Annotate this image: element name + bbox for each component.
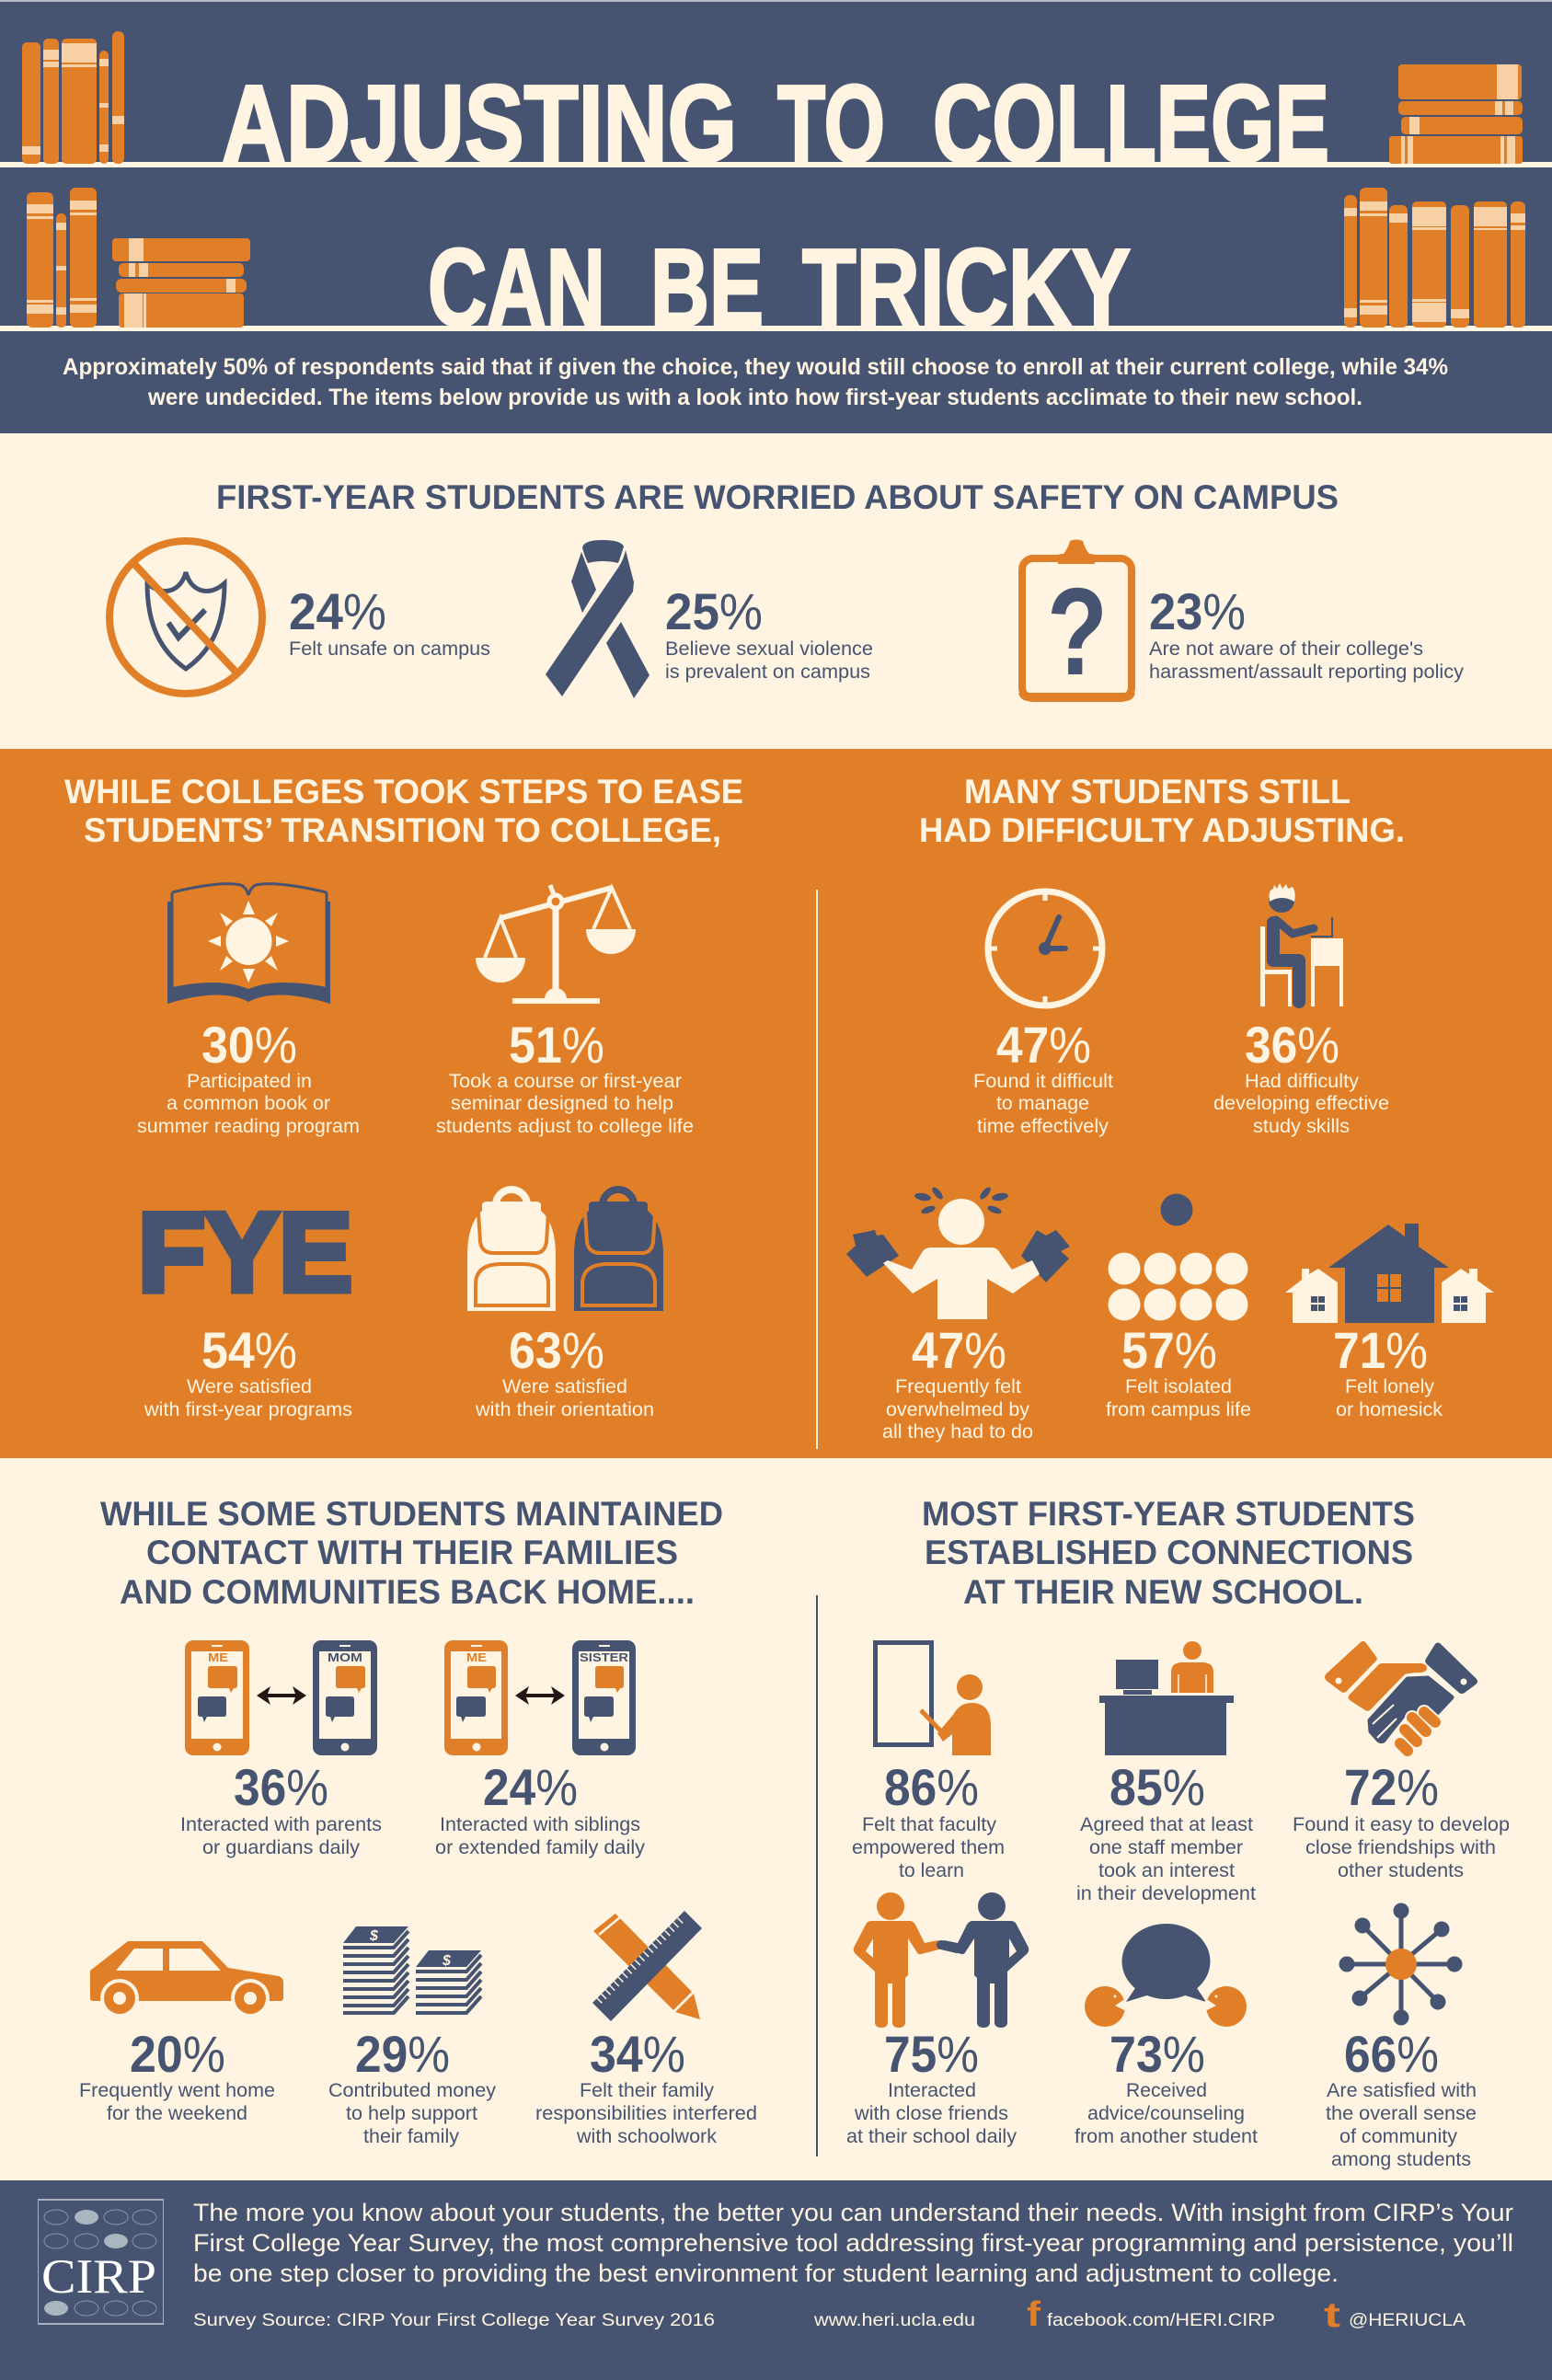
stat: 47% overwhelmed: Frequently felt: [895, 1376, 1021, 1397]
stat: 75%: with close friends: [854, 2103, 1008, 2124]
books: top left: [22, 31, 124, 164]
twitter link: [1324, 2296, 1466, 2335]
stat: 23%: harassment/assault reporting policy: [1149, 661, 1465, 683]
stat: 47% time: Found it difficult: [973, 1071, 1113, 1092]
stat: 29%: to help support: [346, 2103, 477, 2124]
stat: 47% time: 47%: [996, 1016, 1091, 1074]
stat: 73%: from another student: [1075, 2126, 1258, 2147]
stat: 66%: of community: [1339, 2126, 1458, 2147]
stat: 30%: [137, 1016, 360, 1137]
stat: 66%: [1326, 2025, 1477, 2170]
heading: new school: [922, 1495, 1415, 1611]
title line 1: [222, 63, 1329, 186]
icon: money stacks: $: [369, 1928, 379, 1944]
icon: clock: [988, 891, 1102, 1006]
heading: difficulty adjusting: [919, 773, 1405, 849]
stat: 30%: 30%: [201, 1016, 297, 1074]
icon: phone me 2: [444, 1640, 508, 1755]
stat: 54%: Were satisfied: [187, 1376, 312, 1397]
stat: 85%: in their development: [1076, 1883, 1256, 1904]
stat: 72%: Found it easy to develop: [1293, 1814, 1510, 1835]
heading: families: CONTACT WITH THEIR FAMILIES: [146, 1534, 678, 1571]
stat: 36% parents: or guardians daily: [202, 1837, 361, 1858]
icon: two people: [854, 1892, 1029, 2028]
stat: 47% overwhelmed: 47%: [912, 1321, 1006, 1379]
footer text: The more you know about your students, the better you can understand their needs. With insight from CIRP’s Your: [193, 2199, 1513, 2226]
icon: money stacks: [343, 1926, 481, 2013]
icon: phone me 1: ME: [208, 1650, 228, 1664]
heading: steps to ease: WHILE COLLEGES TOOK STEPS TO EASE: [64, 773, 743, 811]
stat: 30%: a common book or: [167, 1093, 330, 1114]
stat: 34%: Felt their family: [580, 2080, 715, 2101]
stat: 72%: other students: [1338, 1860, 1464, 1881]
stat: 86%: [852, 1758, 1005, 1881]
icon: ribbon: [546, 540, 650, 698]
icon: phone sister: SISTER: [580, 1650, 629, 1664]
stat: 34%: [535, 2025, 757, 2147]
stat: 34%: responsibilities interfered: [535, 2103, 757, 2124]
books: bottom right: [1344, 188, 1525, 328]
stat: 36% study: study skills: [1253, 1116, 1350, 1137]
stat: 73%: advice/counseling: [1087, 2103, 1245, 2124]
stat: 66%: the overall sense: [1326, 2103, 1477, 2124]
stat: 72%: 72%: [1344, 1758, 1439, 1816]
stat: 51%: students adjust to college life: [436, 1116, 694, 1137]
stat: 75%: [846, 2025, 1017, 2147]
stat: 25%: Believe sexual violence: [665, 638, 873, 660]
logo: CIRP: [38, 2199, 164, 2325]
intro text: [63, 354, 1448, 410]
survey source: Survey Source: CIRP Your First College Year Survey 2016: [193, 2311, 715, 2330]
stat: 36% parents: Interacted with parents: [180, 1814, 382, 1835]
stat: 36% parents: [180, 1758, 382, 1858]
logo: CIRP: CIRP: [41, 2250, 156, 2304]
stat: 86%: to learn: [899, 1860, 964, 1881]
panel: footer: [0, 2180, 1552, 2380]
stat: 72%: [1293, 1758, 1510, 1881]
footer text: [193, 2199, 1513, 2287]
stat: 20%: for the weekend: [107, 2103, 247, 2124]
intro text: were undecided. The items below provide us with a look into how first-year students acclimate to their new school.: [147, 385, 1362, 410]
heading: families: AND COMMUNITIES BACK HOME....: [120, 1573, 695, 1611]
stat: 66%: Are satisfied with: [1327, 2080, 1477, 2101]
stat: 57%: from campus life: [1106, 1399, 1251, 1420]
icon: car: [90, 1941, 283, 2018]
stat: 20%: Frequently went home: [79, 2080, 275, 2101]
icon: phone sister: [572, 1640, 636, 1755]
icon: overwhelmed person: [846, 1186, 1070, 1319]
panel: safety: [109, 478, 1465, 701]
footer text: be one step closer to providing the best environment for student learning and adjustment to college.: [193, 2259, 1339, 2287]
stat: 47% overwhelmed: [882, 1321, 1033, 1443]
title line 1: ADJUSTING: [222, 63, 737, 186]
panel: transition: [0, 749, 1552, 1458]
stat: 75%: Interacted: [888, 2080, 976, 2101]
stat: 57%: [1106, 1321, 1251, 1420]
stat: 47% time: to manage: [996, 1093, 1089, 1114]
stat: 73%: Received: [1126, 2080, 1207, 2101]
stat: 85%: took an interest: [1098, 1860, 1235, 1881]
heading: difficulty adjusting: HAD DIFFICULTY ADJUSTING.: [919, 811, 1405, 849]
icon: pencil and ruler: [592, 1911, 702, 2021]
icon: teacher at board: [876, 1643, 991, 1755]
stat: 86%: empowered them: [852, 1837, 1005, 1858]
stat: 85%: 85%: [1109, 1758, 1205, 1816]
intro text: Approximately 50% of respondents said that if given the choice, they would still choose to enroll at their current college, while 34%: [63, 354, 1448, 380]
icon: isolated dot: [1108, 1194, 1247, 1321]
stat: 23%: [1149, 582, 1465, 683]
stat: 36% parents: 36%: [234, 1758, 328, 1816]
title line 2: TRICKY: [802, 226, 1131, 350]
shelf 2: [0, 326, 1552, 331]
arrow: two-way 2: [515, 1686, 565, 1705]
heading: steps to ease: STUDENTS’ TRANSITION TO COLLEGE,: [84, 811, 721, 849]
icon: scales: [476, 885, 636, 1004]
icon: money stacks: $: [442, 1953, 452, 1969]
stat: 63%: 63%: [509, 1321, 604, 1379]
panel: connections: [79, 1495, 1510, 2170]
facebook link: facebook.com/HERI.CIRP: [1047, 2311, 1275, 2330]
stat: 47% overwhelmed: all they had to do: [882, 1421, 1033, 1443]
icon: open book with sun: [167, 884, 330, 1004]
stat: 63%: [475, 1321, 654, 1420]
stat: 25%: [665, 582, 873, 683]
heading: families: WHILE SOME STUDENTS MAINTAINED: [100, 1495, 723, 1533]
stat: 75%: at their school daily: [846, 2126, 1017, 2147]
title line 1: COLLEGE: [933, 63, 1329, 186]
stat: 57%: 57%: [1121, 1321, 1217, 1379]
stat: 29%: Contributed money: [328, 2080, 497, 2101]
stat: 54%: [144, 1321, 352, 1420]
icon: phone mom: [313, 1640, 377, 1755]
icon: phone me 1: [185, 1640, 249, 1755]
stat: 24%: [289, 582, 490, 660]
heading: steps to ease: [64, 773, 743, 849]
stat: 51%: 51%: [509, 1016, 604, 1074]
icon: community network: [1339, 1903, 1463, 2026]
heading: new school: AT THEIR NEW SCHOOL.: [963, 1573, 1363, 1611]
stat: 47% time: time effectively: [977, 1116, 1109, 1137]
website: www.heri.ucla.edu: [813, 2311, 975, 2330]
stat: 71%: 71%: [1333, 1321, 1428, 1379]
stat: 24%: Felt unsafe on campus: [289, 638, 490, 660]
stat: 29%: their family: [363, 2126, 460, 2147]
stat: 54%: 54%: [201, 1321, 297, 1379]
stat: 23%: Are not aware of their college's: [1149, 638, 1423, 660]
icon: clipboard question: ?: [1047, 562, 1108, 701]
stat: 30%: summer reading program: [137, 1116, 360, 1137]
icon: crossed-out shield: [109, 541, 262, 694]
stat: 75%: 75%: [884, 2025, 979, 2083]
stat: 36% study: developing effective: [1213, 1093, 1389, 1114]
heading: safety: FIRST-YEAR STUDENTS ARE WORRIED ABOUT SAFETY ON CAMPUS: [216, 478, 1339, 516]
icon: backpack navy: [574, 1190, 663, 1311]
stat: 72%: close friendships with: [1305, 1837, 1496, 1858]
heading: new school: MOST FIRST-YEAR STUDENTS: [922, 1495, 1415, 1533]
stat: 20%: 20%: [130, 2025, 225, 2083]
stat: 71%: or homesick: [1336, 1399, 1443, 1420]
title line 2: CAN: [428, 226, 605, 350]
icon: phone me 2: ME: [466, 1650, 487, 1664]
stat: 25%: 25%: [665, 582, 763, 640]
shelf 1: [0, 162, 1552, 167]
stat: 51%: [436, 1016, 694, 1137]
heading: families: [100, 1495, 723, 1611]
footer text: First College Year Survey, the most comprehensive tool addressing first-year programming and persistence, you’ll: [193, 2229, 1513, 2257]
stat: 36% study: [1213, 1016, 1389, 1137]
icon: clipboard question: [1018, 539, 1135, 701]
stat: 47% overwhelmed: overwhelmed by: [886, 1399, 1030, 1420]
stat: 86%: 86%: [884, 1758, 979, 1816]
icon: staff at desk: [1099, 1641, 1234, 1755]
stat: 23%: 23%: [1149, 582, 1246, 640]
heading: difficulty adjusting: MANY STUDENTS STILL: [964, 773, 1351, 811]
stat: 57%: Felt isolated: [1125, 1376, 1232, 1397]
stat: 66%: 66%: [1344, 2025, 1439, 2083]
books: bottom left: [27, 188, 250, 328]
stat: 36% study: Had difficulty: [1245, 1071, 1360, 1092]
title line 2: BE: [650, 226, 764, 350]
books: top right stack: [1389, 64, 1523, 164]
stat: 51%: Took a course or first-year: [449, 1071, 682, 1092]
twitter link: t: [1324, 2296, 1340, 2335]
panel: header: [0, 0, 1552, 433]
stat: 24% siblings: or extended family daily: [435, 1837, 646, 1858]
stat: 24% siblings: [435, 1758, 646, 1858]
stat: 73%: 73%: [1109, 2025, 1205, 2083]
stat: 29%: [328, 2025, 497, 2147]
stat: 34%: 34%: [590, 2025, 685, 2083]
stat: 24% siblings: Interacted with siblings: [440, 1814, 640, 1835]
stat: 86%: Felt that faculty: [862, 1814, 997, 1835]
title line 1: TO: [777, 63, 885, 186]
icon: houses: [1285, 1224, 1494, 1323]
facebook link: [1027, 2295, 1275, 2334]
stat: 24% siblings: 24%: [483, 1758, 578, 1816]
stat: 34%: with schoolwork: [576, 2126, 717, 2147]
stat: 51%: seminar designed to help: [451, 1093, 673, 1114]
stat: 29%: 29%: [355, 2025, 450, 2083]
stat: 25%: is prevalent on campus: [665, 661, 870, 683]
stat: 85%: Agreed that at least: [1080, 1814, 1253, 1835]
stat: 54%: with first-year programs: [144, 1399, 352, 1420]
heading: new school: ESTABLISHED CONNECTIONS: [925, 1534, 1413, 1571]
title line 2: [428, 226, 1131, 350]
icon: student at desk: [1260, 883, 1343, 1006]
stat: 36% study: 36%: [1245, 1016, 1339, 1074]
stat: 71%: [1333, 1321, 1443, 1420]
stat: 20%: [79, 2025, 275, 2124]
stat: 73%: [1075, 2025, 1258, 2147]
stat: 66%: among students: [1331, 2149, 1471, 2170]
stat: 63%: Were satisfied: [502, 1376, 627, 1397]
icon: backpack cream: [467, 1190, 556, 1311]
twitter link: @HERIUCLA: [1349, 2311, 1466, 2330]
icon: advice speech bubble: [1085, 1924, 1247, 2027]
stat: 24%: 24%: [289, 582, 386, 640]
stat: 47% time: [973, 1016, 1113, 1137]
arrow: two-way 1: [257, 1686, 306, 1705]
stat: 30%: Participated in: [187, 1071, 312, 1092]
facebook link: f: [1027, 2295, 1040, 2334]
icon: FYE: FYE: [138, 1190, 352, 1315]
icon: handshake: [1325, 1641, 1477, 1751]
stat: 71%: Felt lonely: [1345, 1376, 1434, 1397]
stat: 85%: [1076, 1758, 1256, 1904]
icon: phone mom: MOM: [328, 1650, 362, 1664]
stat: 85%: one staff member: [1089, 1837, 1243, 1858]
stat: 63%: with their orientation: [475, 1399, 654, 1420]
